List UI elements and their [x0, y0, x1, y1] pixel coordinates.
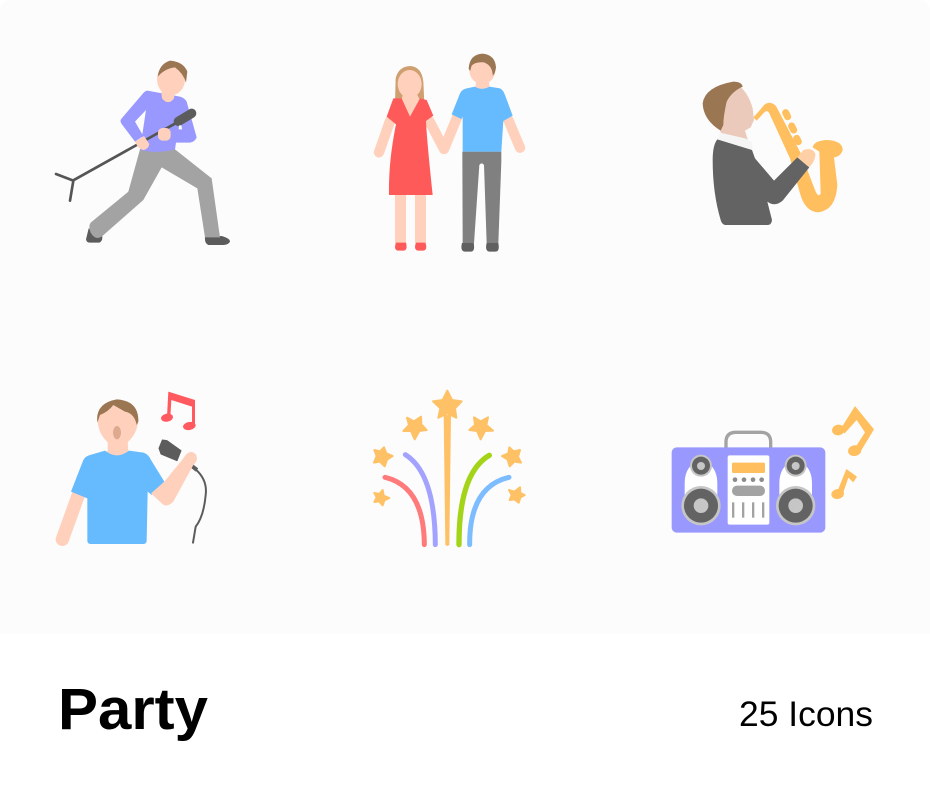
icon count: 25 Icons: [739, 695, 873, 734]
speakers: [681, 455, 815, 525]
icon: saxophone player: [703, 82, 843, 225]
boombox body: [672, 447, 825, 533]
icon: boy singing with microphone: [62, 392, 206, 544]
icon: fireworks: [374, 391, 525, 546]
music notes: [831, 406, 874, 500]
icon: couple holding hands: [379, 54, 520, 252]
icon: singer with mic stand: [56, 61, 230, 245]
speaker housings: [685, 463, 812, 495]
title: Party: [58, 677, 208, 742]
control panel: [728, 455, 769, 525]
icon: boombox with music notes: [672, 406, 874, 533]
boombox handle: [726, 432, 771, 448]
